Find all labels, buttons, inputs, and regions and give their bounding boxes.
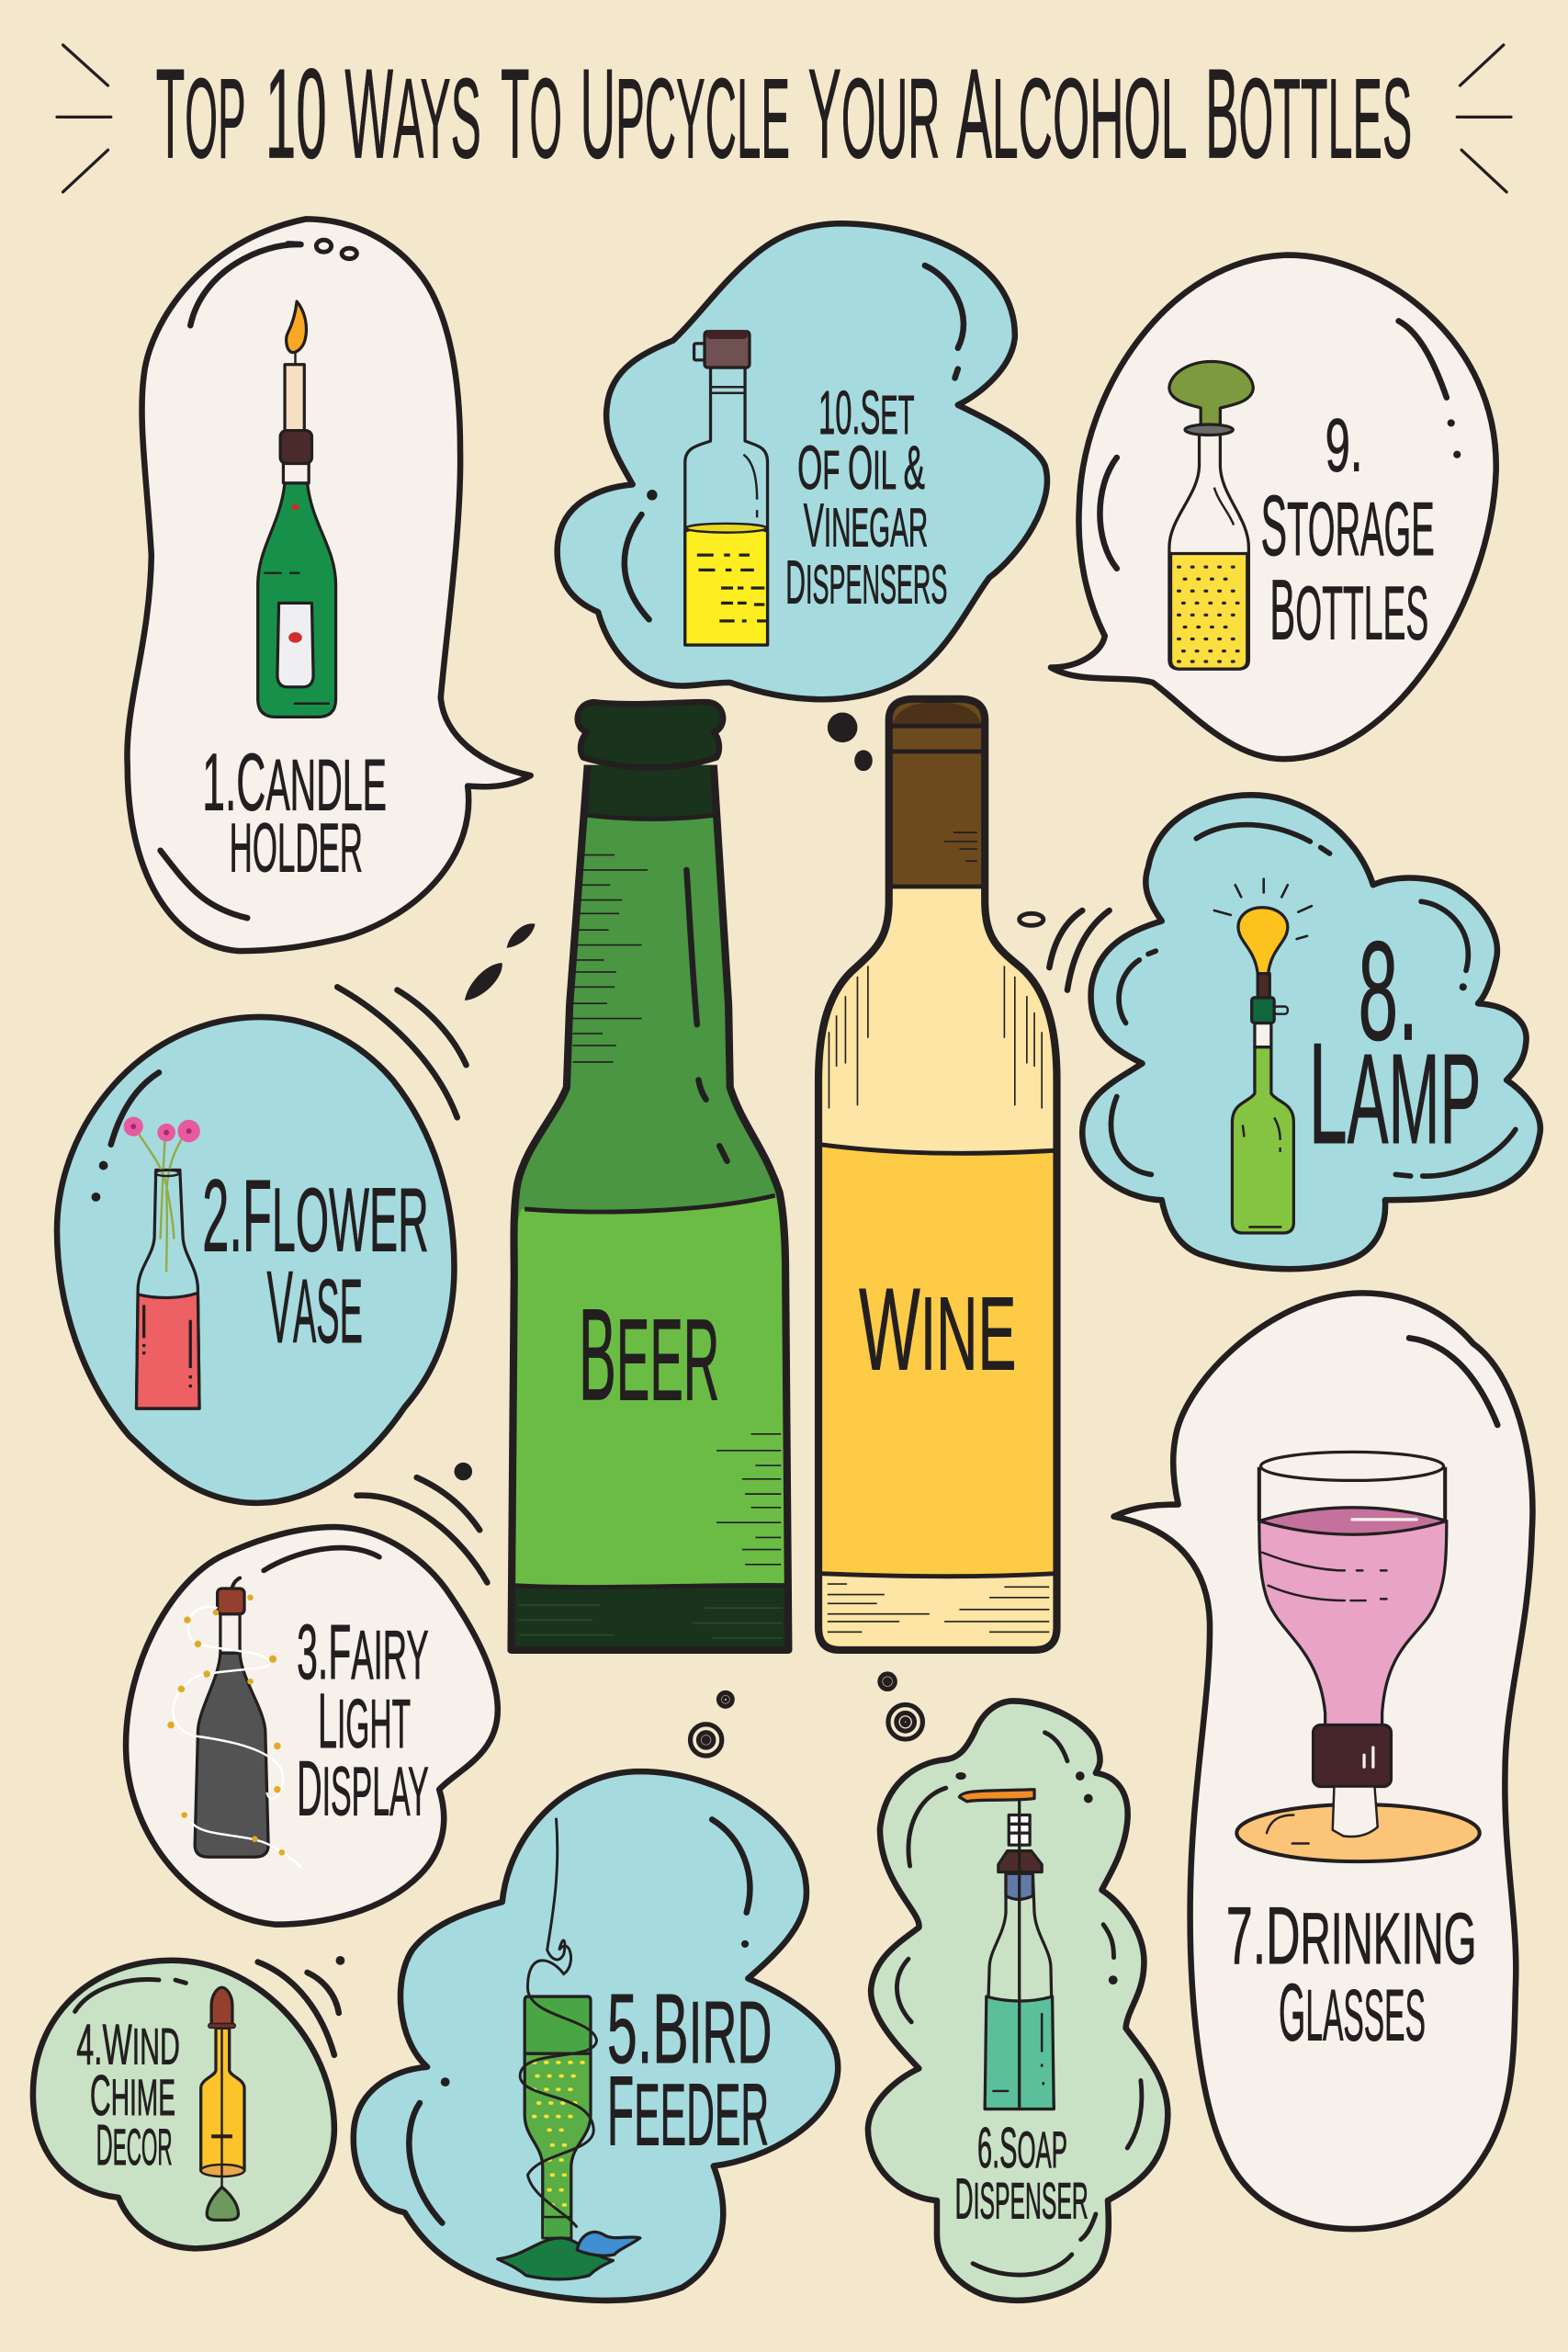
title: 10 <box>265 42 327 185</box>
icon: oil bottle <box>685 330 768 645</box>
icon: fairy light bottle <box>167 1578 301 1868</box>
title: UPCYCLE <box>581 42 790 185</box>
icon: storage bottle <box>1169 361 1253 669</box>
icon: lamp bottle <box>1214 879 1312 1233</box>
icon: candle in bottle <box>258 301 336 717</box>
label: 10 set of oil and vinegar dispensers: 10.SET <box>818 379 914 447</box>
label: 2 flower vase <box>202 1159 429 1364</box>
icon: soap dispenser bottle <box>959 1790 1054 2109</box>
label: 3 fairy light display: 3.FAIRY <box>297 1608 429 1695</box>
panel: 1 candle holder <box>127 219 531 951</box>
title: TO <box>501 42 562 185</box>
label: 4 wind chime decor: 4.WIND <box>76 2014 180 2077</box>
label: 3 fairy light display <box>297 1608 429 1832</box>
label: 1 candle holder <box>202 737 387 887</box>
label: 2 flower vase: VASE <box>266 1250 363 1364</box>
label: 2 flower vase: 2.FLOWER <box>202 1159 429 1273</box>
label: 4 wind chime decor <box>76 2014 180 2177</box>
title: WAYS <box>344 42 481 185</box>
panel: 6 soap dispenser: DISPENSER <box>955 2168 1089 2232</box>
panel: 5 bird feeder: FEEDER <box>607 2055 769 2166</box>
label: 8 lamp: 8. <box>1359 911 1418 1069</box>
panel: 2 flower vase <box>57 1017 454 1503</box>
icon: bottle drinking glass <box>1236 1452 1480 1861</box>
label: 9 storage bottles: 9. <box>1325 404 1362 488</box>
panel: 6 soap dispenser <box>868 1701 1168 2301</box>
label: 8 lamp <box>1309 911 1481 1174</box>
label: 3 fairy light display: DISPLAY <box>297 1744 429 1832</box>
panel: 4 wind chime decor <box>33 1961 334 2248</box>
title: YOUR <box>808 42 940 185</box>
icon: bird feeder bottle <box>498 1818 640 2279</box>
label: 10 set of oil and vinegar dispensers: VINEGAR <box>804 491 928 560</box>
label: 6 soap dispenser <box>955 2117 1089 2232</box>
title <box>156 42 1412 185</box>
panel: wine bottle <box>818 699 1057 1650</box>
panel: 7 drinking glasses <box>1114 1293 1532 2229</box>
label: 3 fairy light display: LIGHT <box>318 1677 411 1764</box>
label: 4 wind chime decor: DECOR <box>96 2114 173 2177</box>
label: 7 drinking glasses <box>1226 1890 1476 2057</box>
label: 10 set of oil and vinegar dispensers <box>785 379 947 616</box>
panel: 9 storage bottles <box>1051 255 1496 759</box>
label: 5 bird feeder <box>607 1973 772 2166</box>
panel: 10 oil and vinegar dispensers <box>558 223 1047 699</box>
panel: 10 oil and vinegar dispensers: DISPENSERS <box>785 548 947 616</box>
label: 1 candle holder: HOLDER <box>230 809 363 887</box>
label: 6 soap dispenser: 6.SOAP <box>977 2117 1067 2180</box>
panel: 5 bird feeder <box>354 1771 838 2301</box>
panel: 8 lamp <box>1082 795 1540 1269</box>
panel: 3 fairy light display <box>126 1527 498 1925</box>
label: wine: WINE <box>859 1264 1016 1395</box>
panel: beer bottle <box>511 702 788 1650</box>
decorative thought marks <box>258 713 1110 2055</box>
label: 1 candle holder: 1.CANDLE <box>202 737 387 828</box>
label: 10 set of oil and vinegar dispensers: OF OIL & <box>797 434 925 503</box>
title accent marks <box>57 45 1511 192</box>
title: TOP <box>156 42 246 185</box>
label: 4 wind chime decor: CHIME <box>90 2064 175 2128</box>
label: 5 bird feeder: 5.BIRD <box>607 1973 772 2084</box>
label: 9 storage bottles <box>1260 404 1435 658</box>
icon: wind chime bottle <box>201 1987 244 2220</box>
icon: flower vase <box>124 1117 200 1408</box>
label: beer: BEER <box>579 1282 719 1428</box>
title: ALCOHOL <box>956 42 1187 185</box>
